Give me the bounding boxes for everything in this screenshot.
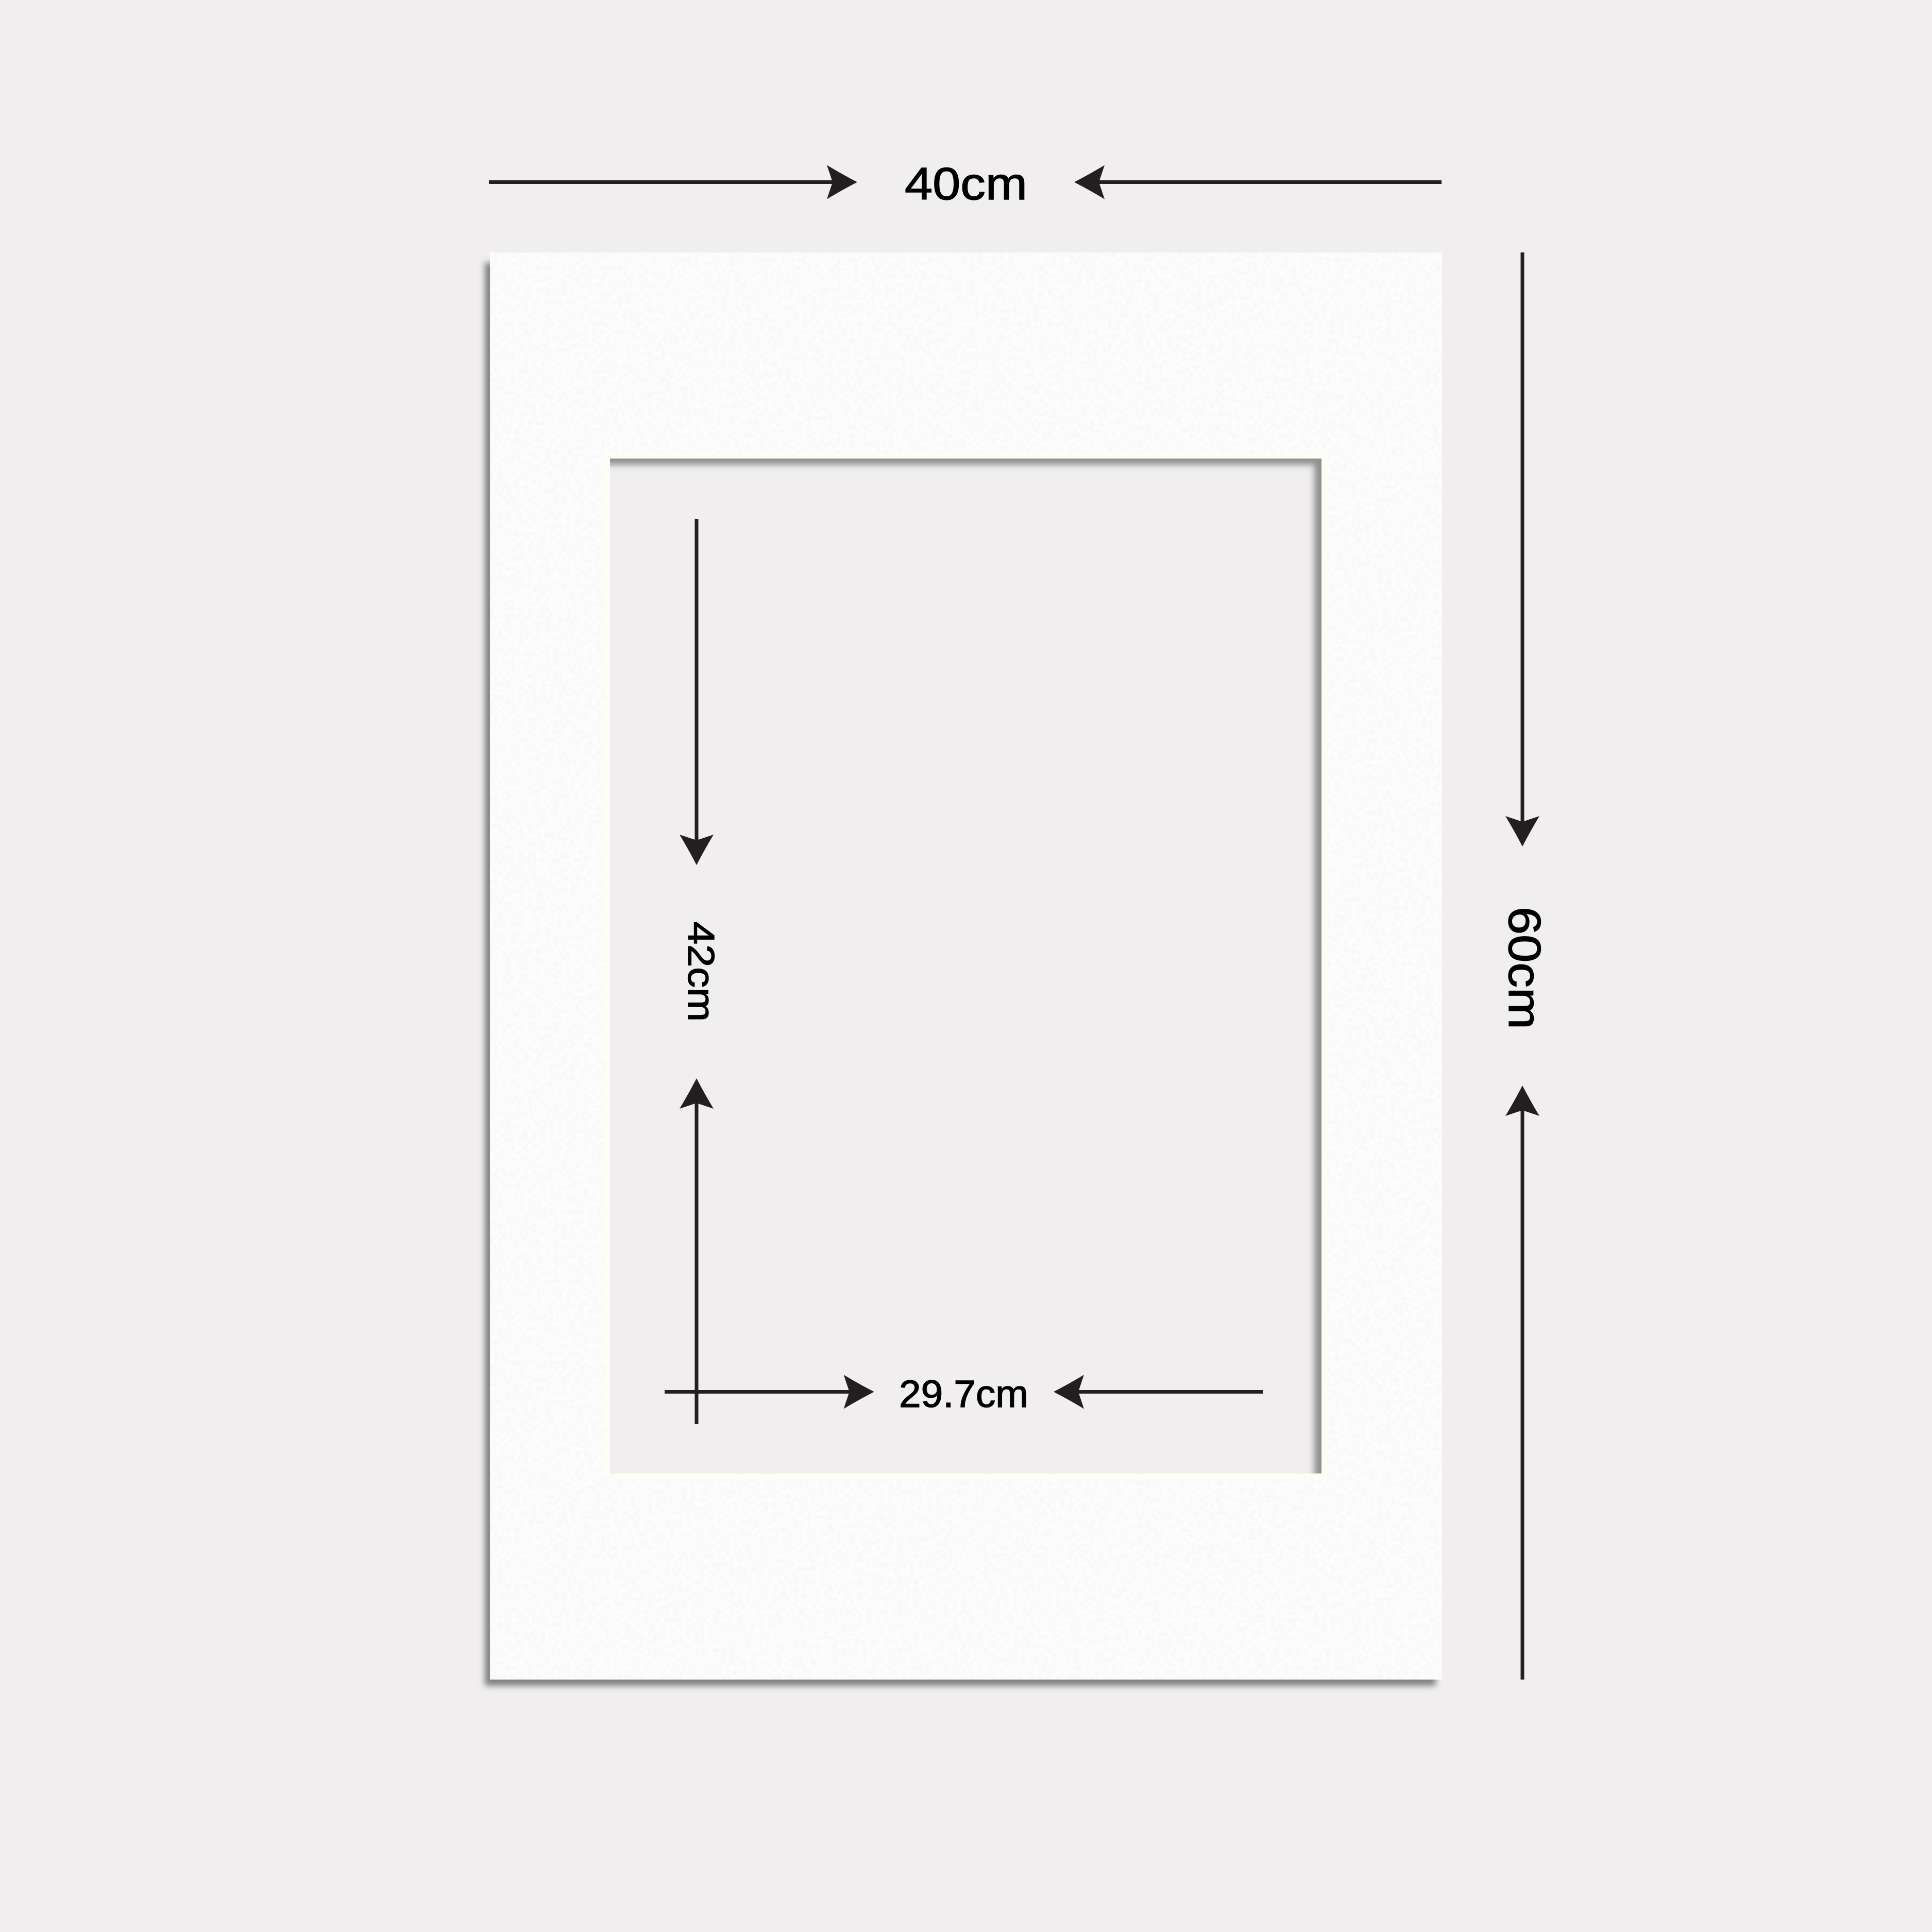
arrow: window height, bottom [680, 1078, 714, 1424]
label: window width: 29.7cm [899, 1372, 1028, 1415]
label: window height: 42cm [680, 922, 721, 1022]
mat outer drop shadow [485, 263, 1436, 1686]
mat paper grain [490, 252, 1442, 1680]
window inner shadow [610, 459, 1321, 1473]
arrow: window width, left [665, 1375, 874, 1409]
label: outer height: 60cm [1499, 907, 1550, 1029]
arrow: window width, right [1054, 1375, 1263, 1409]
mat board [485, 252, 1442, 1686]
label: outer width: 40cm [905, 158, 1027, 209]
arrow: outer width, left [489, 165, 857, 199]
mat window opening [610, 459, 1321, 1473]
arrow: window height, top [680, 519, 714, 865]
mat surface [490, 252, 1442, 1680]
arrow: outer height, top [1505, 252, 1539, 846]
mat bevel edge [608, 456, 1324, 1476]
arrow: outer height, bottom [1505, 1086, 1539, 1680]
arrow: outer width, right [1074, 165, 1442, 199]
